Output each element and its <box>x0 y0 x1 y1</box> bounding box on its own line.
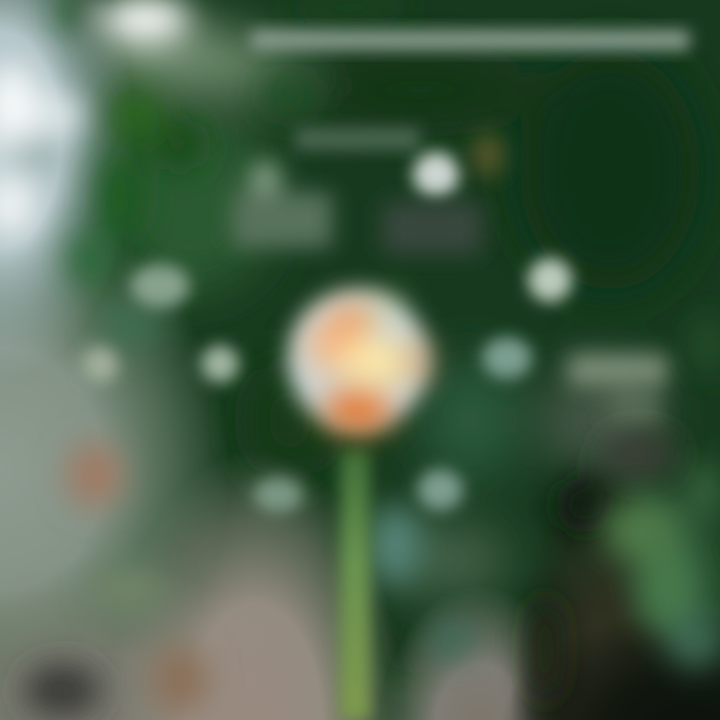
brown accent <box>472 133 504 177</box>
left label block <box>232 161 332 248</box>
central flower <box>288 290 428 432</box>
sky highlights <box>0 0 190 235</box>
left node icon <box>130 264 190 308</box>
teal patches <box>367 505 472 660</box>
bottom left dark patch and brown patch <box>24 565 208 716</box>
flower stem <box>340 450 370 720</box>
subheading <box>295 128 420 150</box>
right leaves <box>602 317 720 668</box>
lower left red accent <box>67 443 123 507</box>
top node icon <box>413 152 459 198</box>
right label block <box>568 354 668 425</box>
right node icon <box>528 258 572 302</box>
title bar <box>250 30 690 50</box>
dark label block <box>382 202 482 254</box>
right node icon, middle <box>482 337 532 379</box>
canopy dark and bright leaves <box>68 0 410 347</box>
dark trunk <box>529 433 678 705</box>
lower left node icons <box>82 345 239 383</box>
lower node icons <box>253 469 463 513</box>
